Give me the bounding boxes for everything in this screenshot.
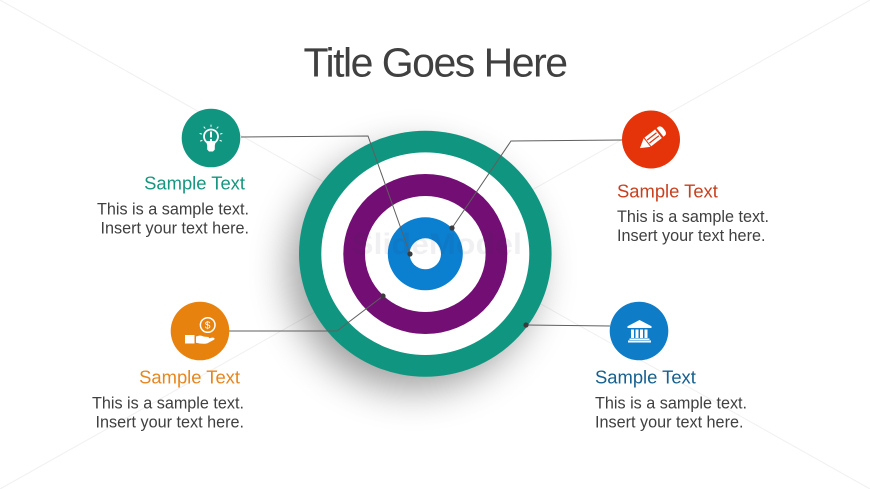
- connector end dots: [380, 225, 529, 328]
- connector: teal callout to blue ring: [241, 136, 410, 254]
- text block: blue callout: Insert your text here.: [595, 414, 743, 432]
- icon: pencil in red circle: [622, 110, 680, 168]
- text block: teal callout: This is a sample text.: [97, 200, 249, 218]
- icon: hand holding coin in orange circle: $: [205, 320, 211, 332]
- text block: red callout: This is a sample text.: [617, 208, 769, 226]
- connector: blue callout to teal ring: [526, 325, 610, 326]
- outer teal ring: [299, 131, 552, 377]
- heading: blue sample text: Sample Text: [595, 366, 696, 388]
- icon: lightbulb in teal circle: [182, 109, 240, 167]
- heading: orange sample text: Sample Text: [139, 366, 240, 388]
- ring shadow: [289, 150, 537, 390]
- text block: blue callout: This is a sample text.: [595, 394, 747, 412]
- heading: red sample text: Sample Text: [617, 180, 718, 202]
- target: concentric rings: [289, 131, 552, 390]
- connector: red callout to blue ring edge: [452, 140, 622, 228]
- watermark: SlideModel: [352, 228, 522, 261]
- connector: orange callout to purple ring: [229, 296, 383, 331]
- title: Title Goes Here: [303, 40, 567, 86]
- icon: hand holding coin in orange circle: [171, 302, 229, 360]
- text block: orange callout: This is a sample text.: [92, 394, 244, 412]
- purple ring: [343, 174, 507, 334]
- text block: red callout: Insert your text here.: [617, 227, 765, 245]
- blue ring: [388, 217, 463, 290]
- text block: teal callout: Insert your text here.: [101, 220, 249, 238]
- text block: orange callout: Insert your text here.: [96, 414, 244, 432]
- icon: bank building in blue circle: [610, 302, 668, 360]
- heading: teal sample text: Sample Text: [144, 172, 245, 194]
